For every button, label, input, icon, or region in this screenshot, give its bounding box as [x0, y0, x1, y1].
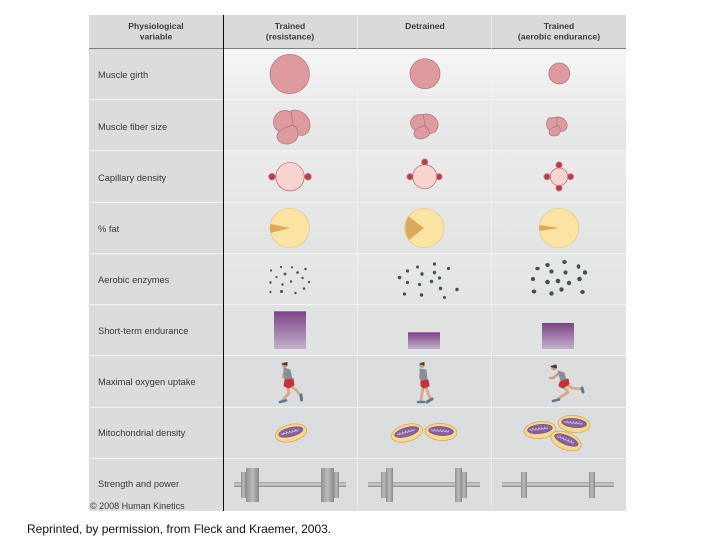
enzymes medium	[398, 262, 459, 299]
heading: trained resistance: (resistance)	[266, 32, 314, 42]
icons: short-term endurance bars	[274, 311, 574, 349]
icons: muscle girth	[270, 54, 570, 94]
icons: capillary density	[269, 159, 574, 191]
row labels: Aerobic enzymes	[98, 275, 170, 285]
row labels: Maximal oxygen uptake	[98, 377, 196, 387]
barbell large	[234, 468, 346, 502]
heading: detrained: Detrained	[405, 21, 445, 31]
runner 3	[550, 365, 583, 401]
icons: mitochondrial density	[273, 414, 591, 455]
runner 2	[418, 362, 432, 402]
row labels: Short-term endurance	[98, 326, 188, 336]
barbell small	[502, 472, 614, 498]
icons: strength and power barbells	[234, 468, 614, 502]
icons: muscle fiber size	[274, 110, 567, 144]
row labels: Muscle fiber size	[98, 122, 167, 132]
runner 1	[280, 362, 302, 402]
row labels	[98, 70, 196, 489]
fiber large	[274, 110, 310, 144]
heading: trained aerobic endurance: (aerobic endurance)	[518, 32, 600, 42]
heading: trained aerobic endurance: Trained	[544, 21, 574, 31]
fiber small	[547, 117, 567, 136]
enzymes many	[531, 260, 587, 296]
heading: physiological variable: variable	[140, 32, 172, 42]
row labels: % fat	[98, 224, 120, 234]
source caption: Reprinted, by permission, from Fleck and Kraemer, 2003.	[27, 522, 331, 536]
barbell medium	[368, 468, 480, 502]
heading: physiological variable: Physiological	[128, 21, 184, 31]
icons: aerobic enzymes	[269, 260, 587, 299]
enzymes few	[269, 266, 310, 294]
row labels: Mitochondrial density	[98, 428, 186, 438]
header row	[89, 15, 626, 49]
table body backgrounds	[89, 15, 626, 511]
row labels: Capillary density	[98, 173, 167, 183]
icons: percent fat	[270, 208, 579, 248]
heading: trained resistance: Trained	[275, 21, 305, 31]
fiber medium	[410, 114, 438, 139]
row labels: Muscle girth	[98, 70, 148, 80]
copyright: © 2008 Human Kinetics	[90, 501, 185, 511]
row labels: Strength and power	[98, 479, 179, 489]
icons: maximal oxygen uptake runners	[280, 362, 583, 402]
